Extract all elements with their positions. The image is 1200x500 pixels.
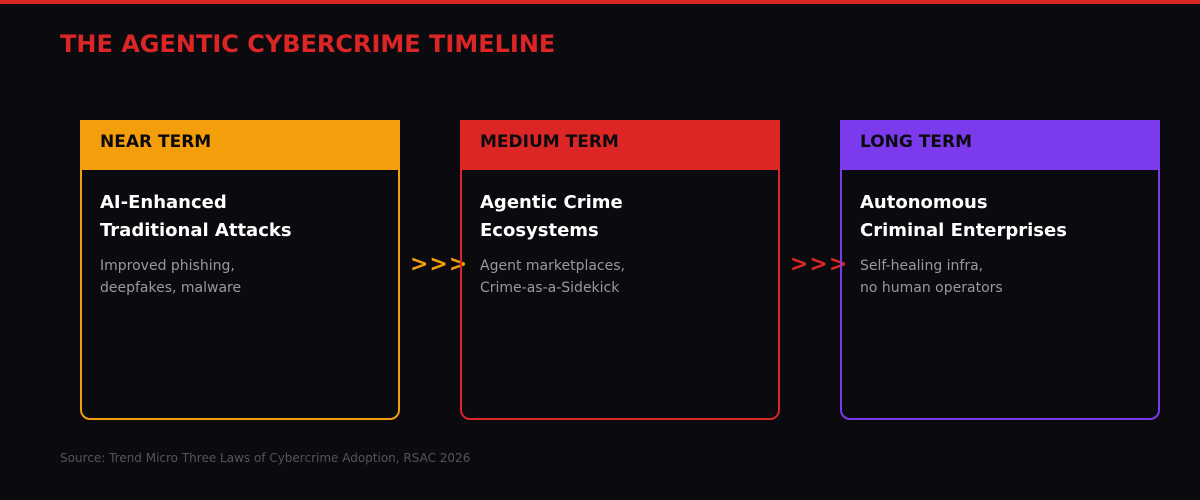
panel: long term <box>840 120 1160 420</box>
description <box>480 258 625 296</box>
description: no human operators <box>860 280 1003 296</box>
description: deepfakes, malware <box>100 280 241 296</box>
subtitle <box>860 192 1067 241</box>
description: Self-healing infra, <box>860 258 983 274</box>
header: medium term <box>460 120 780 170</box>
header: near term <box>80 120 400 170</box>
description: Crime-as-a-Sidekick <box>480 280 619 296</box>
panel: near term <box>80 120 400 420</box>
arrow 2: >>> <box>790 252 848 277</box>
arrow 1: >>> <box>410 252 468 277</box>
header: long term: LONG TERM <box>860 132 972 152</box>
subtitle: Agentic Crime <box>480 192 623 213</box>
description <box>100 258 241 296</box>
panel: medium term <box>460 120 780 420</box>
subtitle: Traditional Attacks <box>100 220 292 241</box>
subtitle: AI-Enhanced <box>100 192 227 213</box>
source note: Source: Trend Micro Three Laws of Cybercrime Adoption, RSAC 2026 <box>60 451 470 465</box>
subtitle <box>480 192 623 241</box>
title: THE AGENTIC CYBERCRIME TIMELINE <box>60 30 555 58</box>
header: long term <box>840 120 1160 170</box>
subtitle: Ecosystems <box>480 220 599 241</box>
description: Improved phishing, <box>100 258 235 274</box>
subtitle <box>100 192 292 241</box>
description <box>860 258 1003 296</box>
header: near term: NEAR TERM <box>100 132 211 152</box>
header: medium term: MEDIUM TERM <box>480 132 619 152</box>
description: Agent marketplaces, <box>480 258 625 274</box>
subtitle: Criminal Enterprises <box>860 220 1067 241</box>
subtitle: Autonomous <box>860 192 988 213</box>
